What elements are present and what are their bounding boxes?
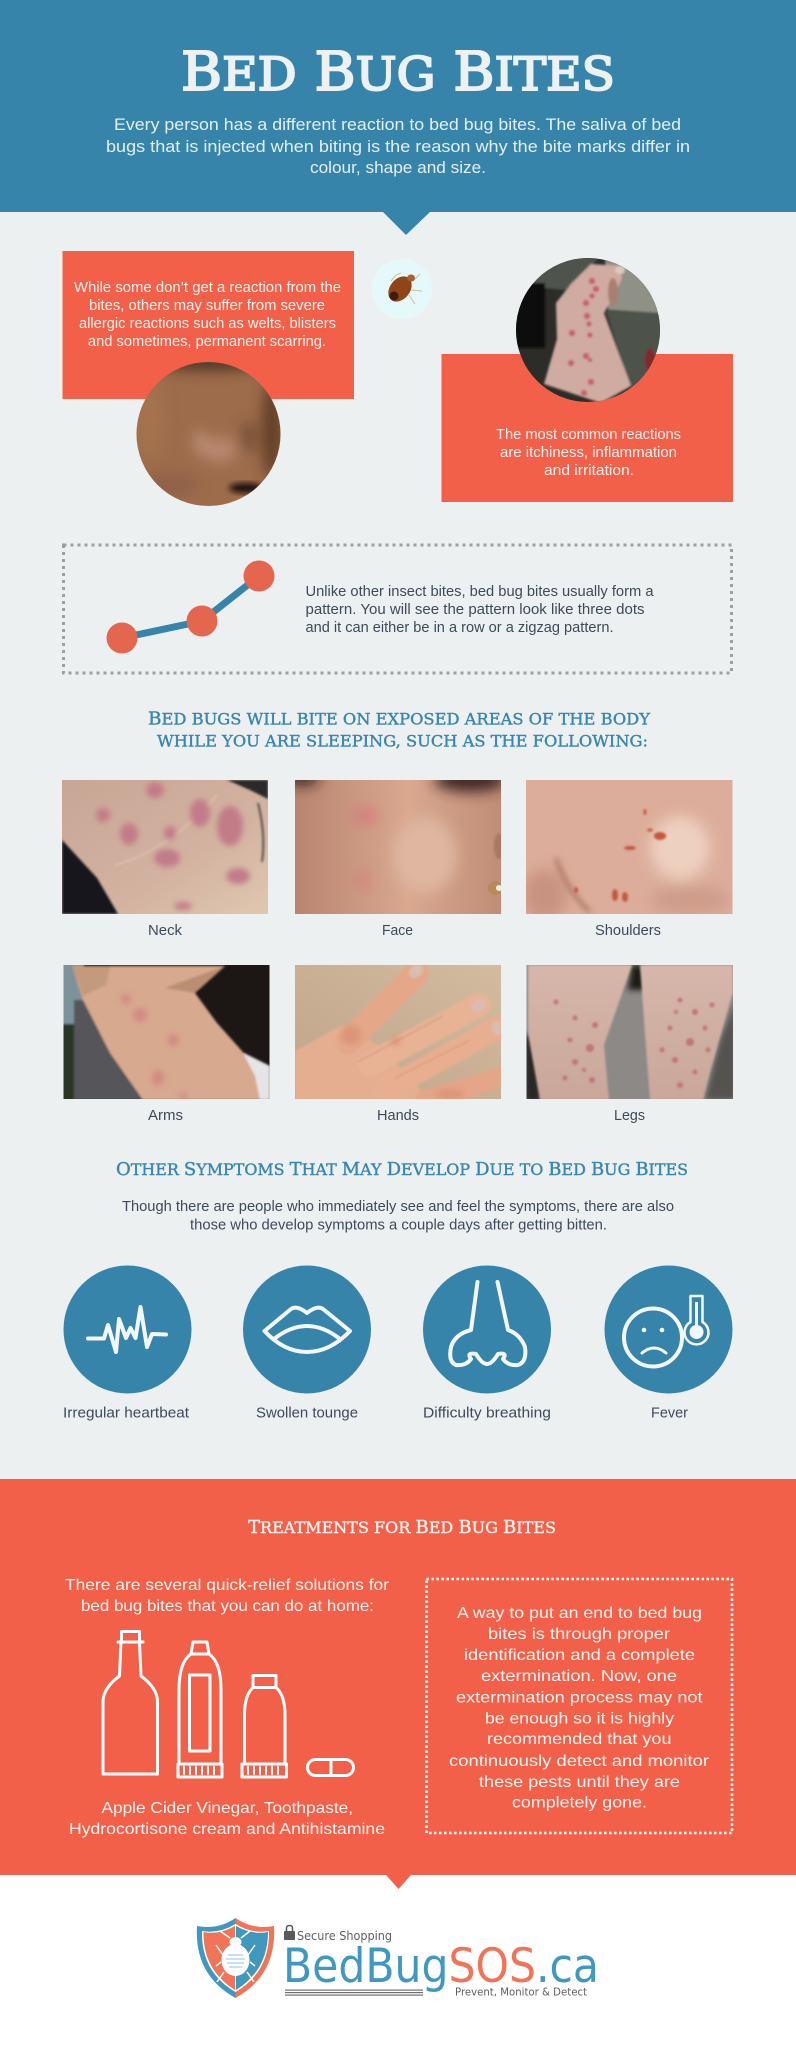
- bite pattern text: Unlike other insect bites, bed bug bites usually form a: [306, 584, 654, 600]
- common reactions text: The most common reactions: [496, 427, 681, 443]
- label: swollen tounge: Swollen tounge: [256, 1406, 358, 1422]
- callout: extermination: recommended that you: [487, 1731, 672, 1748]
- icon: hydrocortisone cream: [242, 1676, 286, 1777]
- home solutions intro: There are several quick-relief solutions for: [65, 1577, 390, 1594]
- heading: exposed areas: BED BUGS WILL BITE ON EXPOSED AREAS OF THE BODY: [148, 710, 651, 730]
- heading: treatments: TREATMENTS FOR BED BUG BITES: [248, 1518, 556, 1538]
- label: arms: Arms: [148, 1108, 183, 1124]
- intro paragraph: bugs that is injected when biting is the reason why the bite marks differ in: [106, 137, 690, 156]
- callout: extermination: identification and a complete: [464, 1647, 695, 1664]
- photo: face: [295, 780, 501, 914]
- allergic reactions text: bites, others may suffer from severe: [89, 298, 325, 314]
- icon: difficulty breathing: [423, 1266, 551, 1394]
- label: face: Face: [382, 923, 413, 939]
- heading: exposed areas: [148, 710, 651, 750]
- callout: extermination: A way to put an end to bed bug: [457, 1605, 702, 1622]
- icon: three dot pattern: [106, 560, 274, 654]
- icon: bed bug: [372, 259, 432, 319]
- callout: extermination: these pests until they are: [479, 1774, 680, 1791]
- photo: legs: [524, 965, 736, 1102]
- intro paragraph: colour, shape and size.: [310, 158, 486, 177]
- photo: foot with bites: [515, 257, 662, 403]
- wordmark: BedBugSOS.ca: [283, 1939, 599, 1994]
- icon: swollen tongue: [243, 1266, 371, 1394]
- footer background: [0, 1875, 796, 2048]
- allergic reactions text: allergic reactions such as welts, blisters: [79, 316, 336, 332]
- panel: treatments: [0, 1479, 796, 1889]
- bite pattern text: [306, 584, 654, 636]
- home solutions intro: [65, 1577, 390, 1615]
- icon: padlock: [284, 1926, 295, 1940]
- tagline: Prevent, Monitor & Detect: [455, 1986, 588, 1998]
- logo: BedBugSOS.ca: [197, 1918, 599, 1998]
- photo: skin welt: [136, 354, 282, 507]
- tagline rules: [285, 1990, 423, 1996]
- icon: toothpaste: [178, 1642, 222, 1777]
- common reactions text: [496, 427, 681, 479]
- common reactions text: and irritation.: [544, 463, 634, 479]
- icon: shield with bed bug: [197, 1918, 274, 1998]
- home remedies list: Hydrocortisone cream and Antihistamine: [69, 1821, 385, 1838]
- panel: bite pattern: [64, 545, 732, 673]
- icon: vinegar bottle: [103, 1632, 158, 1774]
- symptoms paragraph: Though there are people who immediately see and feel the symptoms, there are also: [122, 1199, 674, 1215]
- home solutions intro: bed bug bites that you can do at home:: [81, 1598, 374, 1615]
- callout: extermination: extermination process may not: [456, 1690, 703, 1706]
- label: shoulders: Shoulders: [595, 923, 661, 939]
- intro paragraph: Every person has a different reaction to bed bug bites. The saliva of bed: [114, 115, 681, 134]
- icon: antihistamine pill: [308, 1760, 354, 1776]
- heading: other symptoms: OTHER SYMPTOMS THAT MAY DEVELOP DUE TO BED BUG BITES: [116, 1160, 688, 1180]
- photo: arms: [60, 962, 270, 1102]
- home remedies list: Apple Cider Vinegar, Toothpaste,: [102, 1800, 353, 1817]
- allergic reactions text: and sometimes, permanent scarring.: [88, 334, 326, 350]
- callout: extermination: [426, 1579, 732, 1833]
- panel: allergic reactions: [62, 251, 354, 507]
- callout: extermination: continuously detect and monitor: [449, 1753, 710, 1770]
- title: BED BUG BITES: [181, 42, 615, 103]
- bite pattern text: and it can either be in a row or a zigzag pattern.: [306, 620, 614, 636]
- label: irregular heartbeat: Irregular heartbeat: [63, 1406, 189, 1422]
- label: hands: Hands: [377, 1108, 419, 1124]
- icon: fever: [604, 1266, 732, 1394]
- photo: shoulders: [523, 780, 733, 921]
- home remedies list: [69, 1800, 385, 1838]
- common reactions text: are itchiness, inflammation: [500, 445, 677, 461]
- label: difficulty breathing: Difficulty breathing: [423, 1406, 551, 1422]
- photo: neck: [62, 780, 268, 914]
- photo: hands: [295, 961, 505, 1100]
- allergic reactions text: While some don’t get a reaction from the: [74, 280, 341, 296]
- callout: extermination: completely gone.: [512, 1794, 647, 1812]
- label: legs: Legs: [614, 1108, 645, 1124]
- label: neck: Neck: [148, 923, 183, 939]
- heading: exposed areas: WHILE YOU ARE SLEEPING, SUCH AS THE FOLLOWING:: [157, 732, 648, 750]
- header banner: [0, 0, 796, 235]
- icon: irregular heartbeat: [64, 1266, 192, 1394]
- panel: common reactions: [442, 257, 733, 502]
- bite pattern text: pattern. You will see the pattern look like three dots: [306, 602, 644, 618]
- symptoms paragraph: [122, 1199, 674, 1234]
- callout: extermination: bites is through proper: [488, 1626, 671, 1643]
- label: fever: Fever: [651, 1406, 688, 1422]
- secure shopping label: Secure Shopping: [297, 1929, 392, 1943]
- callout: extermination: be enough so it is highly: [485, 1710, 674, 1728]
- allergic reactions text: [74, 280, 341, 350]
- intro paragraph: [106, 115, 690, 177]
- callout: extermination: extermination. Now, one: [481, 1668, 677, 1685]
- symptoms paragraph: those who develop symptoms a couple days after getting bitten.: [190, 1218, 607, 1234]
